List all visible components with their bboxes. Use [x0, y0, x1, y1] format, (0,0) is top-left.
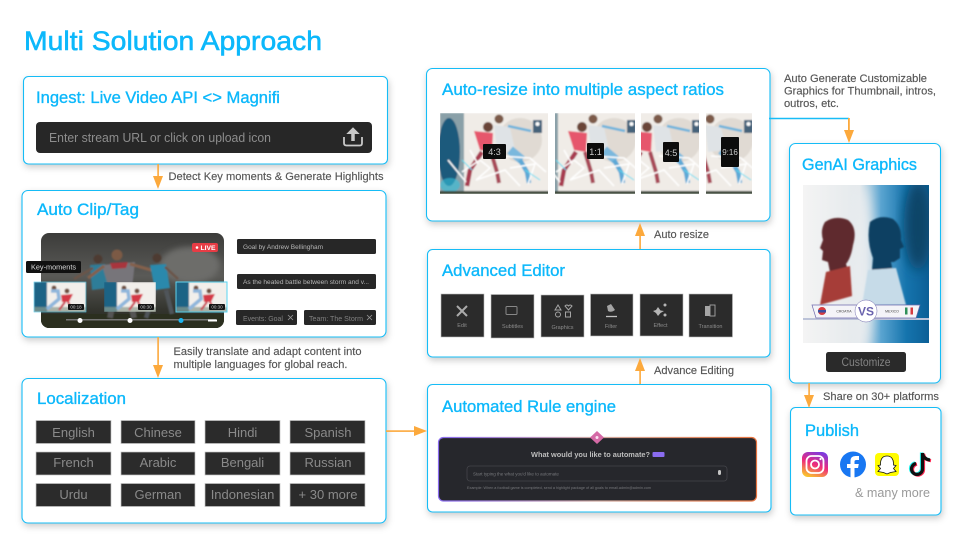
label: translate: multiple languages for global reach.	[174, 359, 348, 371]
image: 4:3 crop: 4:3	[488, 147, 501, 157]
heading: ingest: Ingest: Live Video API <> Magnifi	[36, 88, 280, 107]
icon: sparkle diamond	[590, 431, 604, 444]
language chips: Russian	[305, 455, 351, 470]
input: stream URL: Enter stream URL or click on upload icon	[49, 130, 271, 145]
language chips: German	[135, 487, 181, 502]
thumbnail: moment 1: 00:18	[70, 304, 82, 310]
prompt example: Example: When a football game is completed, send a highlight package of all goals to email.admin@admin.com	[467, 486, 651, 490]
language chips: Hindi	[228, 425, 257, 440]
language chips: Urdu	[59, 487, 88, 502]
badge: live	[192, 243, 218, 252]
tag: events	[236, 310, 297, 325]
panel: ingest	[24, 76, 388, 164]
tool: transition	[689, 294, 732, 337]
tag: team	[304, 310, 376, 325]
label: translate	[174, 346, 362, 371]
arrow: localization to rule engine	[386, 426, 427, 436]
arrow: auto clip to localization	[153, 337, 163, 378]
arrow: ingest to auto clip	[153, 164, 163, 189]
badge: beta	[652, 452, 664, 457]
panel: genai graphics	[790, 144, 940, 383]
tooltip: key moments	[26, 261, 81, 273]
tool: filter: Filter	[605, 324, 617, 330]
heading: advanced editor: Advanced Editor	[442, 261, 565, 280]
heading: auto-resize: Auto-resize into multiple aspect ratios	[442, 80, 724, 99]
text: many more: & many more	[855, 485, 930, 500]
heading: publish: Publish	[805, 421, 859, 440]
tag: description: As the heated battle between storm and v...	[243, 279, 369, 286]
language chips: Chinese	[134, 425, 182, 440]
tool: subtitles: Subtitles	[502, 324, 523, 330]
tag: goal	[237, 239, 376, 254]
language chips: Indonesian	[211, 487, 274, 502]
thumbnail: moment 1	[34, 282, 86, 312]
label: auto generate: Auto Generate Customizable	[784, 73, 927, 85]
panel: auto-resize	[424, 68, 775, 228]
heading: localization: Localization	[37, 389, 126, 408]
connector: auto-resize to genai	[769, 118, 854, 143]
tool: graphics	[541, 295, 584, 337]
thumbnail: moment 3	[176, 282, 228, 312]
thumbnail: moment 3: 00:30	[211, 304, 223, 310]
image: 9:16 crop	[706, 113, 752, 194]
thumbnail: moment 2: 00:30	[140, 304, 152, 310]
tool: edit	[441, 294, 484, 337]
heading: genai: GenAI Graphics	[802, 155, 917, 174]
tag: goal: Goal by Andrew Bellingham	[243, 244, 323, 251]
prompt input	[467, 466, 727, 481]
arrow: genai to publish	[804, 383, 814, 408]
language chips: English	[52, 425, 95, 440]
icon: facebook	[840, 452, 866, 478]
versus banner: MEXICO	[885, 310, 899, 314]
language chips: Arabic	[140, 455, 177, 470]
icon: snapchat	[875, 453, 899, 476]
versus banner: CROATIA	[836, 310, 852, 314]
panel: automated rule engine	[428, 384, 771, 512]
tool: transition: Transition	[699, 324, 722, 330]
language chips	[36, 420, 365, 506]
language chips: Spanish	[305, 425, 351, 440]
tool: effect: Effect	[654, 323, 668, 329]
tool: filter	[590, 294, 633, 336]
label: share: Share on 30+ platforms	[823, 391, 940, 403]
label: auto resize: Auto resize	[654, 229, 709, 241]
tooltip: key moments: Key-moments	[31, 264, 77, 272]
input: stream URL	[36, 122, 372, 153]
video preview	[41, 233, 224, 328]
versus banner: VS	[858, 304, 874, 318]
tool: graphics: Graphics	[551, 325, 574, 331]
title: Multi Solution Approach	[24, 26, 322, 56]
panel: auto clip and tag	[22, 190, 386, 337]
heading: auto clip: Auto Clip/Tag	[37, 200, 139, 219]
image: 4:5 crop	[641, 113, 699, 194]
language chips: French	[53, 455, 94, 470]
heading: automated rule engine: Automated Rule engine	[442, 397, 616, 416]
icon: tiktok	[911, 452, 931, 475]
language chips: Bengali	[221, 455, 264, 470]
versus banner	[812, 300, 920, 322]
label: auto generate: Graphics for Thumbnail, intros,	[784, 86, 936, 98]
automation prompt box	[438, 431, 756, 501]
image: versus poster	[803, 185, 929, 343]
icon: instagram	[802, 452, 828, 477]
label: auto generate: outros, etc.	[784, 98, 839, 110]
label: translate: Easily translate and adapt content into	[174, 346, 362, 358]
label: detect key moments: Detect Key moments & Generate Highlights	[168, 171, 384, 183]
tag: events: Events: Goal	[243, 314, 283, 323]
label: auto generate	[784, 73, 936, 110]
tool: effect	[640, 294, 683, 336]
panel: publish	[790, 408, 941, 515]
image: 1:1 crop: 1:1	[589, 147, 602, 157]
tool: subtitles	[491, 294, 534, 338]
panel: advanced editor	[428, 250, 770, 357]
button: customize	[826, 352, 906, 372]
arrow: rule engine to editor	[635, 358, 645, 384]
tool: edit: Edit	[457, 323, 467, 329]
image: 9:16 crop: 9:16	[722, 148, 738, 157]
button: customize: Customize	[842, 357, 890, 369]
image: 4:5 crop: 4:5	[665, 148, 677, 158]
arrow: editor to auto-resize	[635, 223, 645, 249]
prompt input: Start typing the what you'd like to automate	[473, 472, 559, 476]
language chips: + 30 more	[299, 487, 357, 502]
prompt heading: What would you like to automate?	[531, 450, 650, 459]
timeline markers	[78, 318, 217, 323]
badge: live: LIVE	[200, 246, 216, 252]
image: 1:1 crop	[555, 113, 635, 194]
tag: team: Team: The Storm	[309, 314, 363, 323]
image: 4:3 crop	[440, 113, 548, 194]
tag: description	[237, 274, 376, 289]
icon: upload	[344, 128, 362, 146]
label: advance editing: Advance Editing	[654, 365, 734, 377]
thumbnail: moment 2	[104, 282, 156, 312]
panel: localization	[22, 378, 386, 523]
